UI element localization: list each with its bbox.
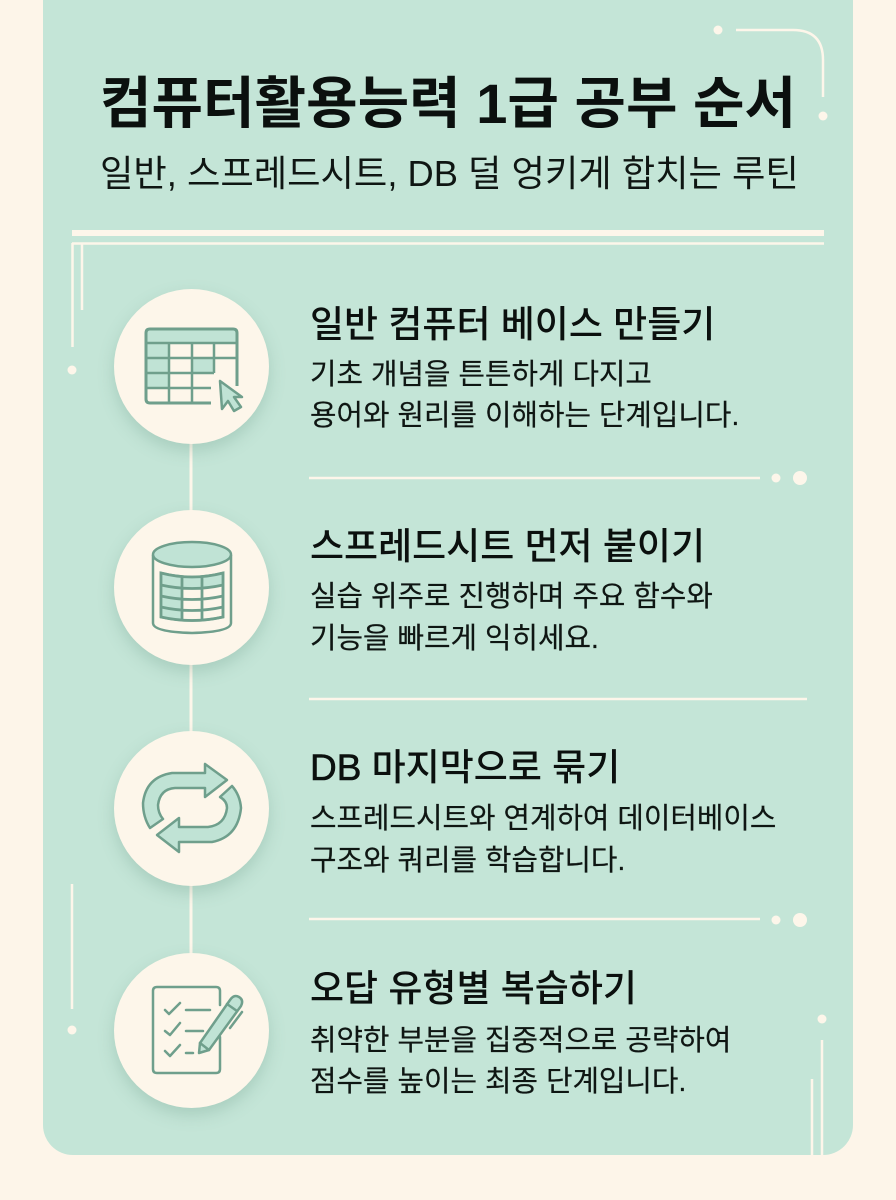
step 4 text: 취약한 부분을 집중적으로 공략하여 bbox=[310, 1025, 731, 1057]
step 1 heading: 일반 컴퓨터 베이스 만들기 bbox=[310, 304, 715, 345]
step 2 text: 실습 위주로 진행하며 주요 함수와 bbox=[310, 581, 713, 613]
step 3 heading: DB 마지막으로 묶기 bbox=[310, 747, 620, 788]
step 1 text line 2: 용어와 원리를 이해하는 단계입니다. bbox=[310, 400, 739, 432]
step 4 text line 2: 점수를 높이는 최종 단계입니다. bbox=[310, 1066, 686, 1098]
step 4 heading: 오답 유형별 복습하기 bbox=[310, 968, 637, 1009]
title: 컴퓨터활용능력 1급 공부 순서 bbox=[100, 72, 796, 135]
step 3 text: 스프레드시트와 연계하여 데이터베이스 bbox=[310, 803, 776, 835]
step 2 heading: 스프레드시트 먼저 붙이기 bbox=[310, 526, 705, 567]
step 1 icon: spreadsheet with cursor bbox=[114, 289, 269, 444]
step 2 text line 2: 기능을 빠르게 익히세요. bbox=[310, 623, 599, 655]
step 1 text: 기초 개념을 튼튼하게 다지고 bbox=[310, 359, 652, 391]
step 4 icon: checklist with pen bbox=[114, 953, 269, 1108]
subtitle: 일반, 스프레드시트, DB 덜 엉키게 합치는 루틴 bbox=[100, 153, 799, 194]
step 3 icon: cycle arrows bbox=[114, 731, 269, 886]
step 2 icon: database table bbox=[114, 510, 269, 665]
step 3 text line 2: 구조와 쿼리를 학습합니다. bbox=[310, 845, 625, 877]
